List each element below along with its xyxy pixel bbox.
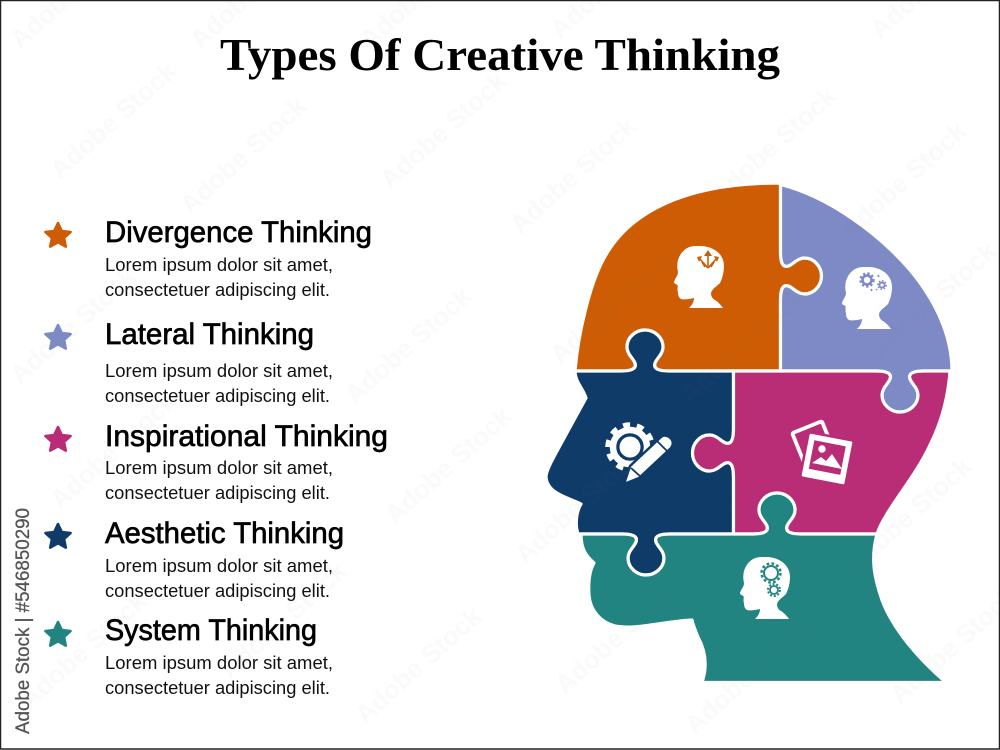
watermark pattern: Adobe Stock xyxy=(504,110,643,239)
description xyxy=(105,556,333,601)
heading: Lateral Thinking: Lateral Thinking xyxy=(105,318,314,351)
description: Lorem ipsum dolor sit amet, xyxy=(105,361,333,381)
watermark pattern: Adobe Stock xyxy=(374,65,513,194)
watermark pattern: Adobe Stock xyxy=(549,570,688,699)
description xyxy=(105,255,333,300)
puzzle piece: periwinkle xyxy=(780,184,952,412)
watermark pattern: Adobe Stock xyxy=(379,400,518,529)
list item: Divergence Thinking xyxy=(45,216,372,300)
description: Lorem ipsum dolor sit amet, xyxy=(105,458,333,478)
watermark pattern: Adobe Stock xyxy=(674,280,813,409)
description xyxy=(105,361,333,406)
watermark pattern: Adobe Stock xyxy=(44,385,183,514)
star bullet: magenta xyxy=(45,427,71,451)
list item: Aesthetic Thinking xyxy=(45,517,344,601)
list item: Inspirational Thinking xyxy=(45,420,388,503)
description xyxy=(105,653,333,698)
icon: head with diverging arrows xyxy=(674,246,724,308)
icon: head with scattered gears xyxy=(842,267,892,329)
description: consectetuer adipiscing elit. xyxy=(105,483,330,503)
description: consectetuer adipiscing elit. xyxy=(105,280,330,300)
description: Lorem ipsum dolor sit amet, xyxy=(105,653,333,673)
watermark pattern: Adobe Stock xyxy=(834,115,973,244)
heading: Aesthetic Thinking: Aesthetic Thinking xyxy=(105,517,344,550)
description: Lorem ipsum dolor sit amet, xyxy=(105,255,333,275)
watermark pattern: Adobe Stock xyxy=(349,600,488,729)
watermark pattern: Adobe Stock xyxy=(174,90,313,219)
puzzle piece: teal xyxy=(581,493,946,682)
icon: gear and pencil xyxy=(608,425,673,484)
watermark pattern: Adobe Stock xyxy=(4,260,143,389)
star bullet: teal xyxy=(45,622,71,646)
watermark pattern: Adobe Stock xyxy=(509,440,648,569)
heading: System Thinking: System Thinking xyxy=(105,614,317,647)
puzzle piece: magenta xyxy=(692,371,950,534)
watermark pattern: Adobe Stock xyxy=(679,610,818,739)
star bullet: periwinkle xyxy=(45,325,71,349)
watermark pattern: Adobe Stock xyxy=(14,585,153,714)
icon: stacked photos xyxy=(792,421,854,486)
description: consectetuer adipiscing elit. xyxy=(105,678,330,698)
watermark pattern: Adobe Stock xyxy=(864,235,1000,364)
watermark pattern: Adobe Stock xyxy=(704,80,843,209)
watermark pattern: Adobe Stock xyxy=(44,55,183,184)
icon: head with two gears xyxy=(740,557,790,619)
star bullet: navy xyxy=(45,524,71,548)
title: Types Of Creative Thinking xyxy=(220,29,780,80)
watermark pattern: Adobe Stock xyxy=(339,280,478,409)
stock id vertical text: Adobe Stock | #546850290 xyxy=(13,508,34,734)
watermark pattern: Adobe Stock xyxy=(544,240,683,369)
watermark pattern: Adobe Stock xyxy=(214,555,353,684)
list of thinking types xyxy=(45,216,388,698)
heading: Inspirational Thinking: Inspirational Thinking xyxy=(105,420,388,453)
description: consectetuer adipiscing elit. xyxy=(105,581,330,601)
description xyxy=(105,458,333,503)
puzzle head diagram xyxy=(546,183,952,682)
list item: System Thinking xyxy=(45,614,333,698)
description: Lorem ipsum dolor sit amet, xyxy=(105,556,333,576)
puzzle piece: orange xyxy=(575,183,822,371)
puzzle piece: navy xyxy=(546,330,734,575)
list item: Lateral Thinking xyxy=(45,318,333,406)
heading: Divergence Thinking: Divergence Thinking xyxy=(105,216,372,249)
description: consectetuer adipiscing elit. xyxy=(105,386,330,406)
star bullet: orange xyxy=(45,223,71,247)
watermark pattern: Adobe Stock xyxy=(839,450,978,579)
